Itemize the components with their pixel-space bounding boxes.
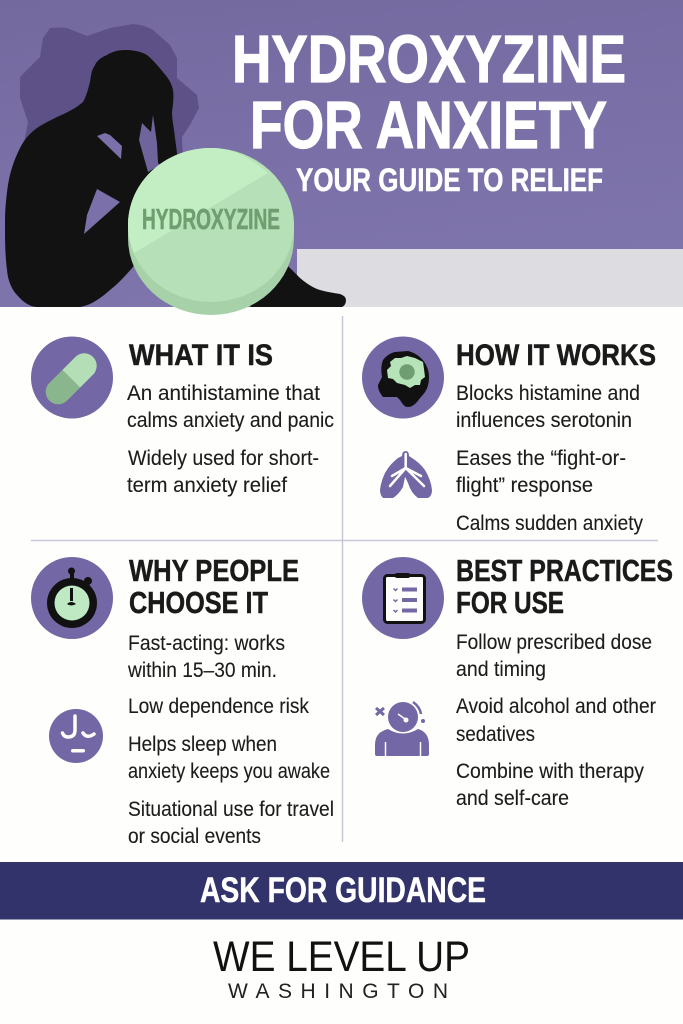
panel: what it is — [31, 336, 334, 497]
text block: Blocks histamine and — [456, 382, 640, 405]
logo: WASHINGTON — [228, 980, 448, 1003]
subtitle: YOUR GUIDE TO RELIEF — [296, 162, 603, 198]
text block: anxiety keeps you awake — [128, 760, 330, 783]
heading: HOW IT WORKS — [456, 339, 656, 372]
icon: stopwatch — [31, 557, 113, 639]
text block: Avoid alcohol and other — [456, 695, 656, 718]
heading: WHAT IT IS — [129, 339, 273, 372]
icon: clipboard — [362, 557, 444, 639]
text block: sedatives — [456, 723, 535, 746]
shadow behind figure — [20, 24, 199, 160]
panel: best practices — [362, 553, 673, 810]
icon: lungs — [380, 451, 432, 498]
text block: influences serotonin — [456, 409, 632, 432]
text block: Follow prescribed dose — [456, 631, 652, 654]
logo — [213, 933, 470, 1003]
logo: WE LEVEL UP — [213, 933, 470, 981]
text block: or social events — [128, 825, 261, 848]
text block: Combine with therapy — [456, 760, 644, 783]
text block: Low dependence risk — [128, 695, 309, 718]
call to action bar — [0, 862, 683, 920]
heading — [456, 553, 673, 620]
call to action bar: ASK FOR GUIDANCE — [200, 871, 486, 910]
gap between arms — [97, 133, 122, 159]
text block: and self-care — [456, 787, 569, 810]
text block: Situational use for travel — [128, 798, 334, 821]
figure silhouette — [5, 50, 178, 307]
icon: capsule — [31, 336, 113, 418]
text block — [456, 631, 656, 810]
pill — [128, 148, 294, 315]
text block: and timing — [456, 658, 546, 681]
text block: calms anxiety and panic — [127, 409, 334, 432]
gap between head and arm — [139, 115, 160, 172]
pill label: HYDROXYZINE — [142, 204, 280, 236]
icon: sleepy face — [49, 709, 103, 763]
text block: within 15–30 min. — [127, 659, 277, 682]
text block: Calms sudden anxiety — [456, 512, 643, 535]
text block — [127, 632, 334, 848]
heading: WHY PEOPLE — [129, 553, 299, 588]
text block: term anxiety relief — [127, 474, 287, 497]
text block — [456, 382, 643, 535]
text block — [127, 382, 334, 497]
text block: Eases the “fight-or- — [456, 447, 626, 470]
text block: Fast-acting: works — [128, 632, 285, 655]
panel: why people choose it — [31, 553, 334, 848]
title — [232, 22, 626, 163]
text block: Helps sleep when — [128, 733, 277, 756]
panel: how it works — [362, 336, 656, 535]
heading — [129, 553, 299, 620]
text block: An antihistamine that — [127, 382, 320, 405]
icon: brain in head — [362, 336, 444, 418]
heading: CHOOSE IT — [129, 585, 268, 620]
floor panel — [297, 249, 683, 307]
text block: Widely used for short- — [128, 447, 319, 470]
figure foot — [250, 262, 346, 307]
gap under arm — [84, 189, 120, 234]
icon: dizzy person — [375, 702, 429, 756]
header banner — [0, 0, 683, 315]
heading: FOR USE — [456, 585, 564, 620]
text block: flight” response — [456, 474, 593, 497]
